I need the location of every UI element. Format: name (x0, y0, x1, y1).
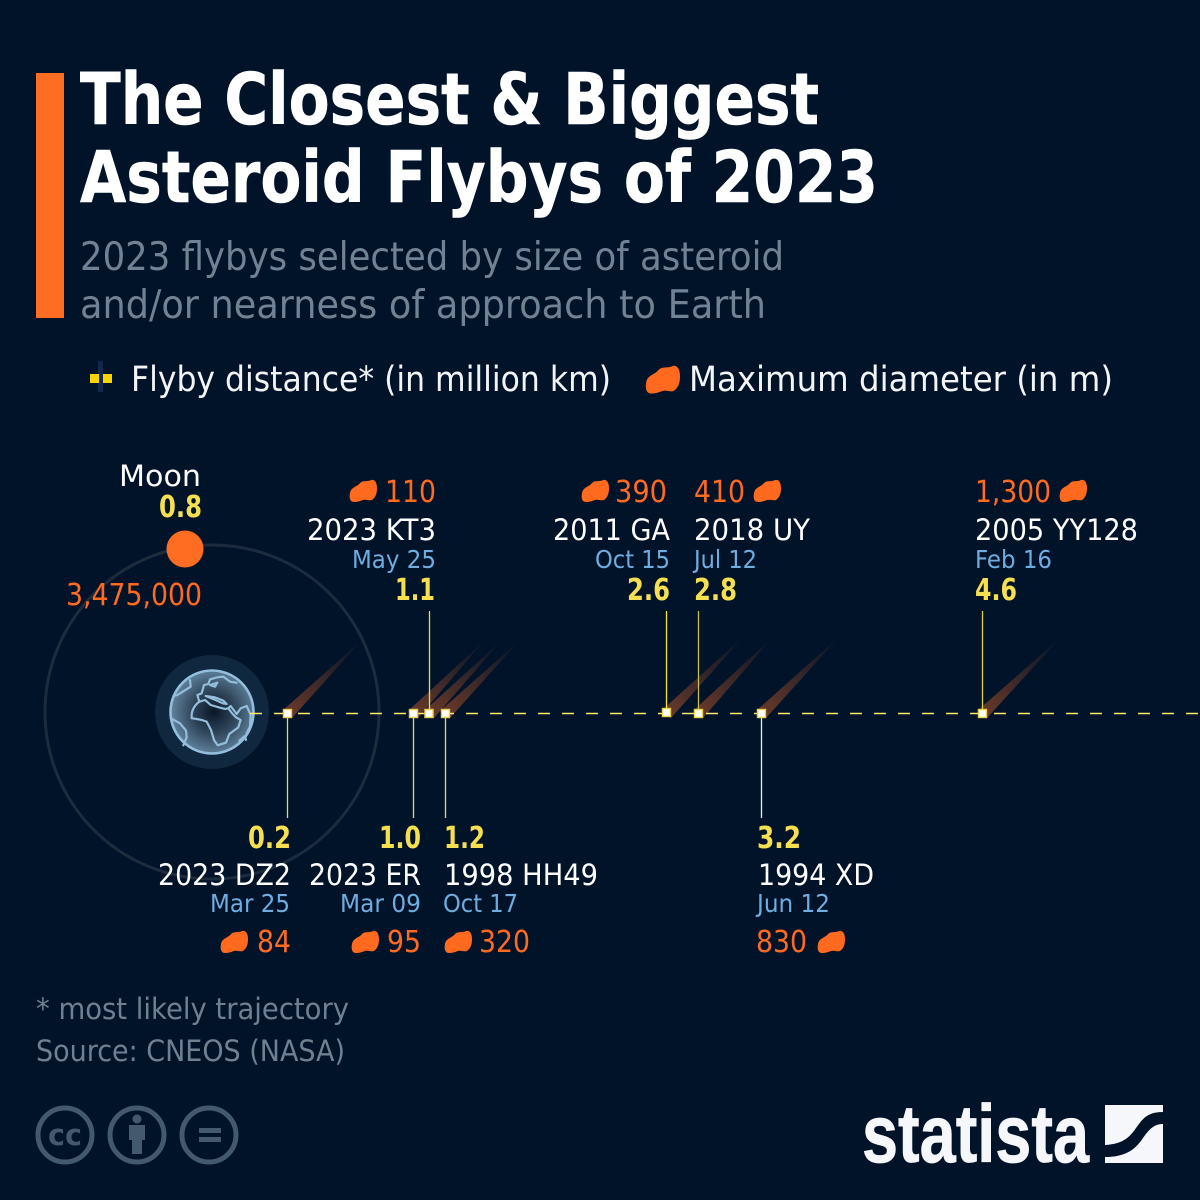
title: Asteroid Flybys of 2023 (80, 136, 878, 219)
flyby: 2023 ER: 95 (387, 925, 421, 960)
flyby: 2005 YY128 (975, 475, 1138, 608)
legend: diameter label: Maximum diameter (in m) (689, 360, 1113, 400)
flyby: 2005 YY128: 1,300 (975, 475, 1051, 510)
earth (155, 655, 269, 769)
leader lines (288, 611, 982, 818)
flyby: 2018 UY: 2018 UY (694, 513, 810, 547)
flyby: 2023 KT3: May 25 (352, 545, 436, 574)
subtitle: 2023 flybys selected by size of asteroid (80, 235, 784, 280)
subtitle (80, 235, 784, 328)
flyby: 2011 GA: 390 (615, 475, 667, 510)
flyby: 1994 XD: 830 (756, 925, 807, 960)
flyby: 2023 KT3 (307, 475, 436, 608)
footnote and source (36, 992, 349, 1068)
legend: asteroid icon (646, 366, 680, 394)
flyby: 2023 KT3: 1.1 (395, 573, 435, 608)
distance axis (250, 712, 1200, 714)
icon: creative commons (38, 1108, 92, 1162)
flyby: 2023 DZ2: Mar 25 (210, 889, 290, 918)
legend: flyby distance label: Flyby distance* (in million km) (131, 360, 611, 400)
asteroid trails (282, 636, 1060, 718)
flyby: 2023 DZ2: 0.2 (248, 821, 291, 856)
flyby: 2023 ER (309, 821, 421, 960)
flyby: 2018 UY: 2.8 (694, 573, 737, 608)
moon: Moon (119, 459, 201, 493)
flyby: 1998 HH49 (443, 821, 598, 960)
flyby: 2023 KT3: 2023 KT3 (307, 513, 436, 547)
moon (66, 459, 204, 613)
flyby: 1994 XD: 1994 XD (758, 858, 874, 892)
flyby: 1994 XD: 3.2 (757, 821, 801, 856)
flyby markers (284, 708, 986, 718)
title: The Closest & Biggest (80, 58, 819, 141)
moon: 3,475,000 (66, 578, 202, 613)
flyby: 2023 KT3: 110 (385, 475, 436, 510)
flyby: 1998 HH49: Oct 17 (443, 889, 518, 918)
flyby: 2011 GA: 2011 GA (553, 513, 670, 547)
flyby: 2023 DZ2: 84 (257, 925, 291, 960)
flyby: 2005 YY128: 4.6 (975, 573, 1017, 608)
moon orbit (45, 545, 379, 879)
flyby: 2023 ER: 2023 ER (309, 858, 421, 892)
flyby: 2011 GA: 2.6 (627, 573, 670, 608)
flyby: 1994 XD (755, 821, 874, 960)
flyby: 1998 HH49: 1998 HH49 (444, 858, 598, 892)
flyby: 2005 YY128: Feb 16 (975, 545, 1052, 574)
flyby: 2023 ER: 1.0 (379, 821, 421, 856)
legend: flyby marker icon (90, 361, 112, 392)
flyby: 2018 UY: Jul 12 (692, 545, 757, 574)
subtitle: and/or nearness of approach to Earth (80, 283, 766, 328)
icon: attribution (110, 1108, 164, 1162)
moon: 0.8 (159, 490, 202, 525)
flyby: 2011 GA: Oct 15 (595, 545, 670, 574)
footnote and source: * most likely trajectory (36, 992, 349, 1026)
icon: no derivatives (182, 1108, 236, 1162)
footnote and source: Source: CNEOS (NASA) (36, 1034, 345, 1068)
flyby: 2023 DZ2: 2023 DZ2 (158, 858, 291, 892)
flyby: 1998 HH49: 320 (479, 925, 530, 960)
legend (90, 360, 1113, 400)
flyby: 2023 ER: Mar 09 (340, 889, 421, 918)
accent bar (36, 73, 64, 318)
title (80, 58, 878, 219)
flyby: 1994 XD: Jun 12 (755, 889, 830, 918)
statista logo: statista (862, 1089, 1090, 1180)
flyby: 2011 GA (553, 475, 670, 608)
flyby: 2018 UY: 410 (694, 475, 745, 510)
icon: creative commons: cc (48, 1118, 82, 1152)
flyby: 2018 UY (692, 475, 810, 608)
flyby: 2023 DZ2 (158, 821, 291, 960)
flyby: 2005 YY128: 2005 YY128 (975, 513, 1138, 547)
flyby: 1998 HH49: 1.2 (444, 821, 485, 856)
